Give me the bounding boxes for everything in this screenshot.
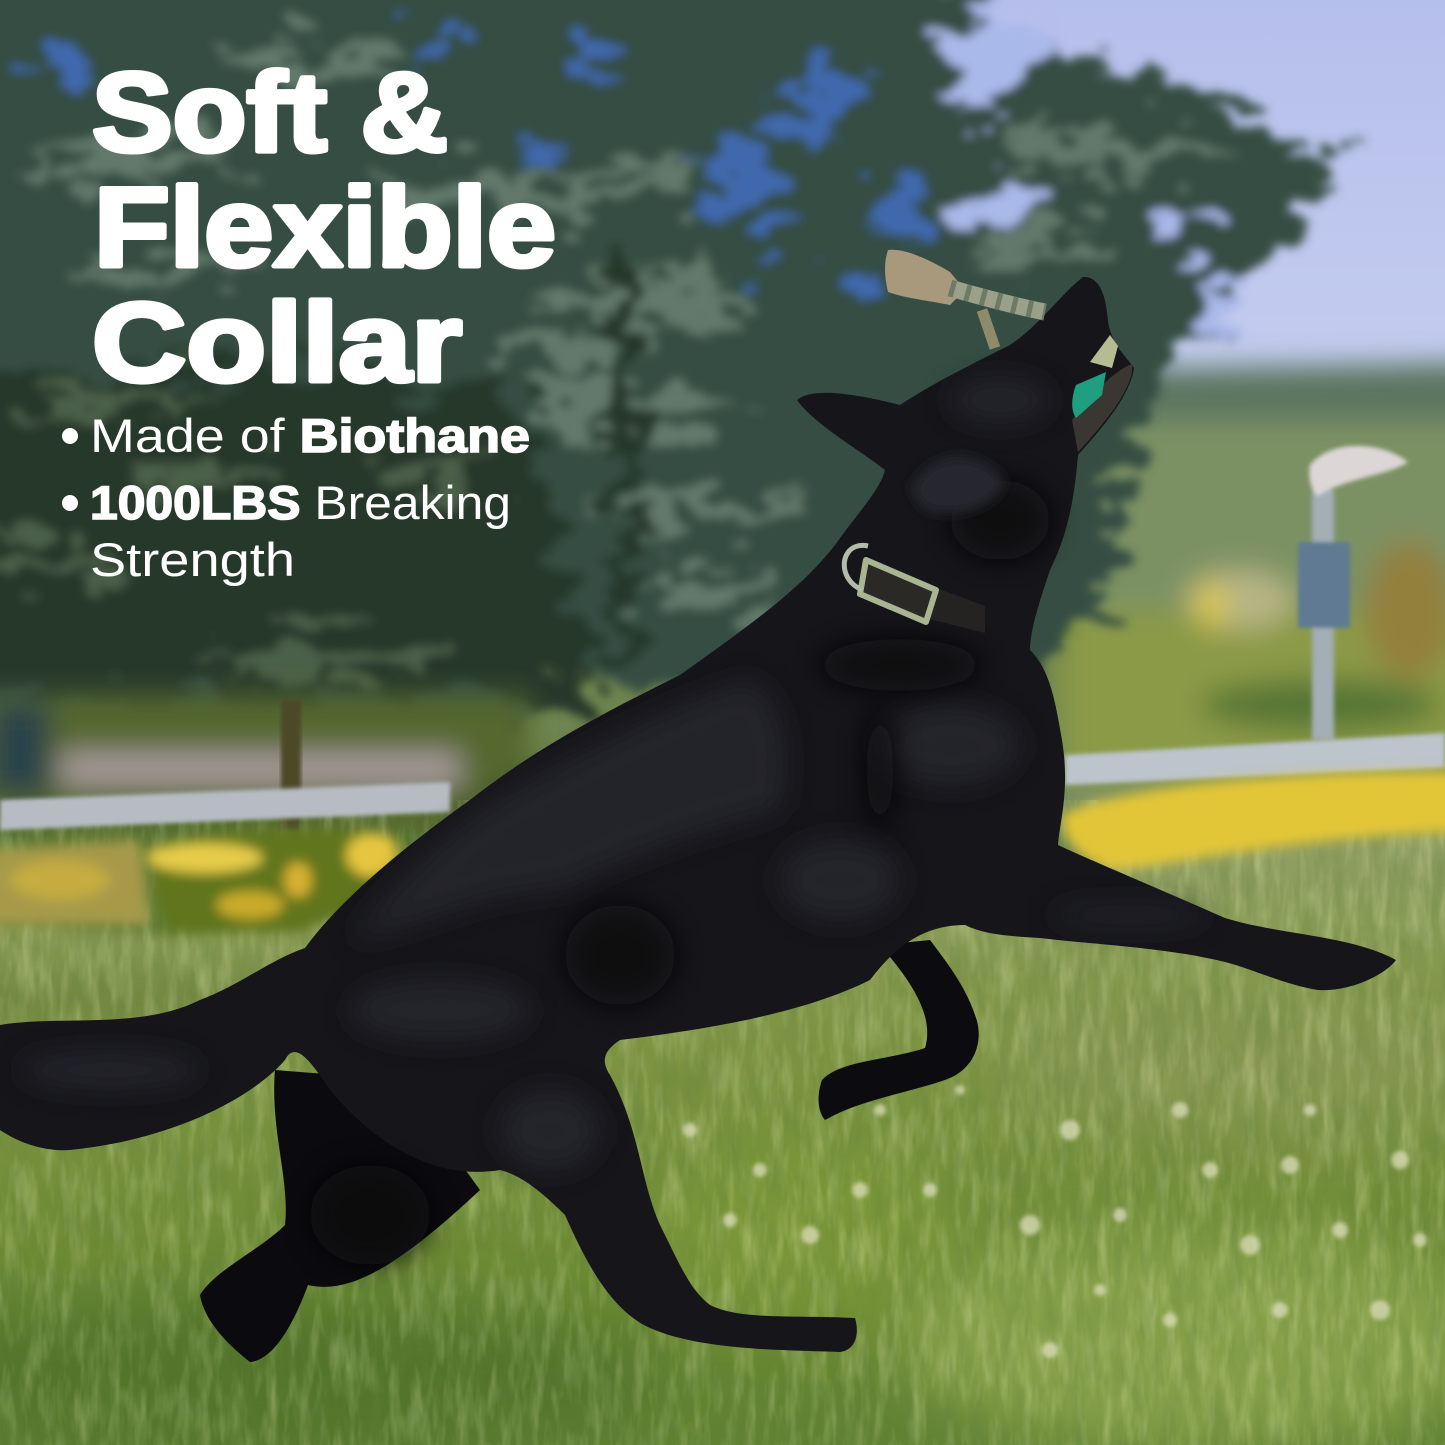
dog: body silhouette	[0, 277, 1396, 1352]
toy: rope in mouth	[1090, 335, 1118, 368]
collar	[844, 545, 985, 633]
toy: teal ball	[1072, 372, 1106, 418]
background: midground lawn backing	[440, 460, 1445, 900]
collar: buckle frame	[860, 560, 936, 622]
background: blurred distant hillside	[1060, 362, 1445, 820]
dog: fur highlights	[20, 378, 1210, 1170]
rope toy	[885, 250, 1118, 418]
dog: ear fold highlight	[910, 457, 1005, 513]
title	[92, 50, 556, 405]
background: grass shading	[0, 986, 1445, 1445]
dog: rear far leg	[200, 1070, 480, 1362]
dog: mouth	[1072, 364, 1132, 452]
bullet: made of biothane: Made of Biothane	[90, 409, 530, 462]
toy: rope frayed end	[885, 250, 965, 305]
background: clover flowers	[683, 1085, 1427, 1358]
toy: rope loop	[982, 310, 995, 348]
bullet: breaking strength: 1000LBS Breaking	[90, 476, 511, 529]
title: Soft &	[92, 50, 448, 175]
background: yellow flower hedges	[0, 772, 1445, 932]
background: lamp post and sign	[1298, 446, 1408, 740]
background: grass field	[0, 825, 1445, 1445]
dog: deep shadows	[310, 480, 1050, 1265]
title: Collar	[92, 280, 462, 405]
collar: d-ring	[844, 545, 868, 590]
dog: raised front leg	[819, 940, 979, 1120]
bullet: breaking strength: Strength	[90, 533, 295, 586]
dog	[0, 277, 1396, 1362]
background: pine tree	[0, 0, 1340, 750]
toy: rope twist texture	[950, 288, 1045, 312]
title: Flexible	[94, 165, 556, 290]
bullet: breaking strength	[62, 476, 511, 586]
collar: strap	[858, 560, 985, 633]
background: shrubs and lawn behind tree	[0, 695, 530, 835]
background: tree trunk	[281, 700, 301, 830]
background: sky	[0, 0, 1445, 500]
background: grass blade texture	[0, 900, 1445, 1445]
background: grass dark blade texture	[0, 900, 1445, 1445]
toy: rope strand	[950, 288, 1045, 312]
background: guard rails	[0, 733, 1445, 830]
